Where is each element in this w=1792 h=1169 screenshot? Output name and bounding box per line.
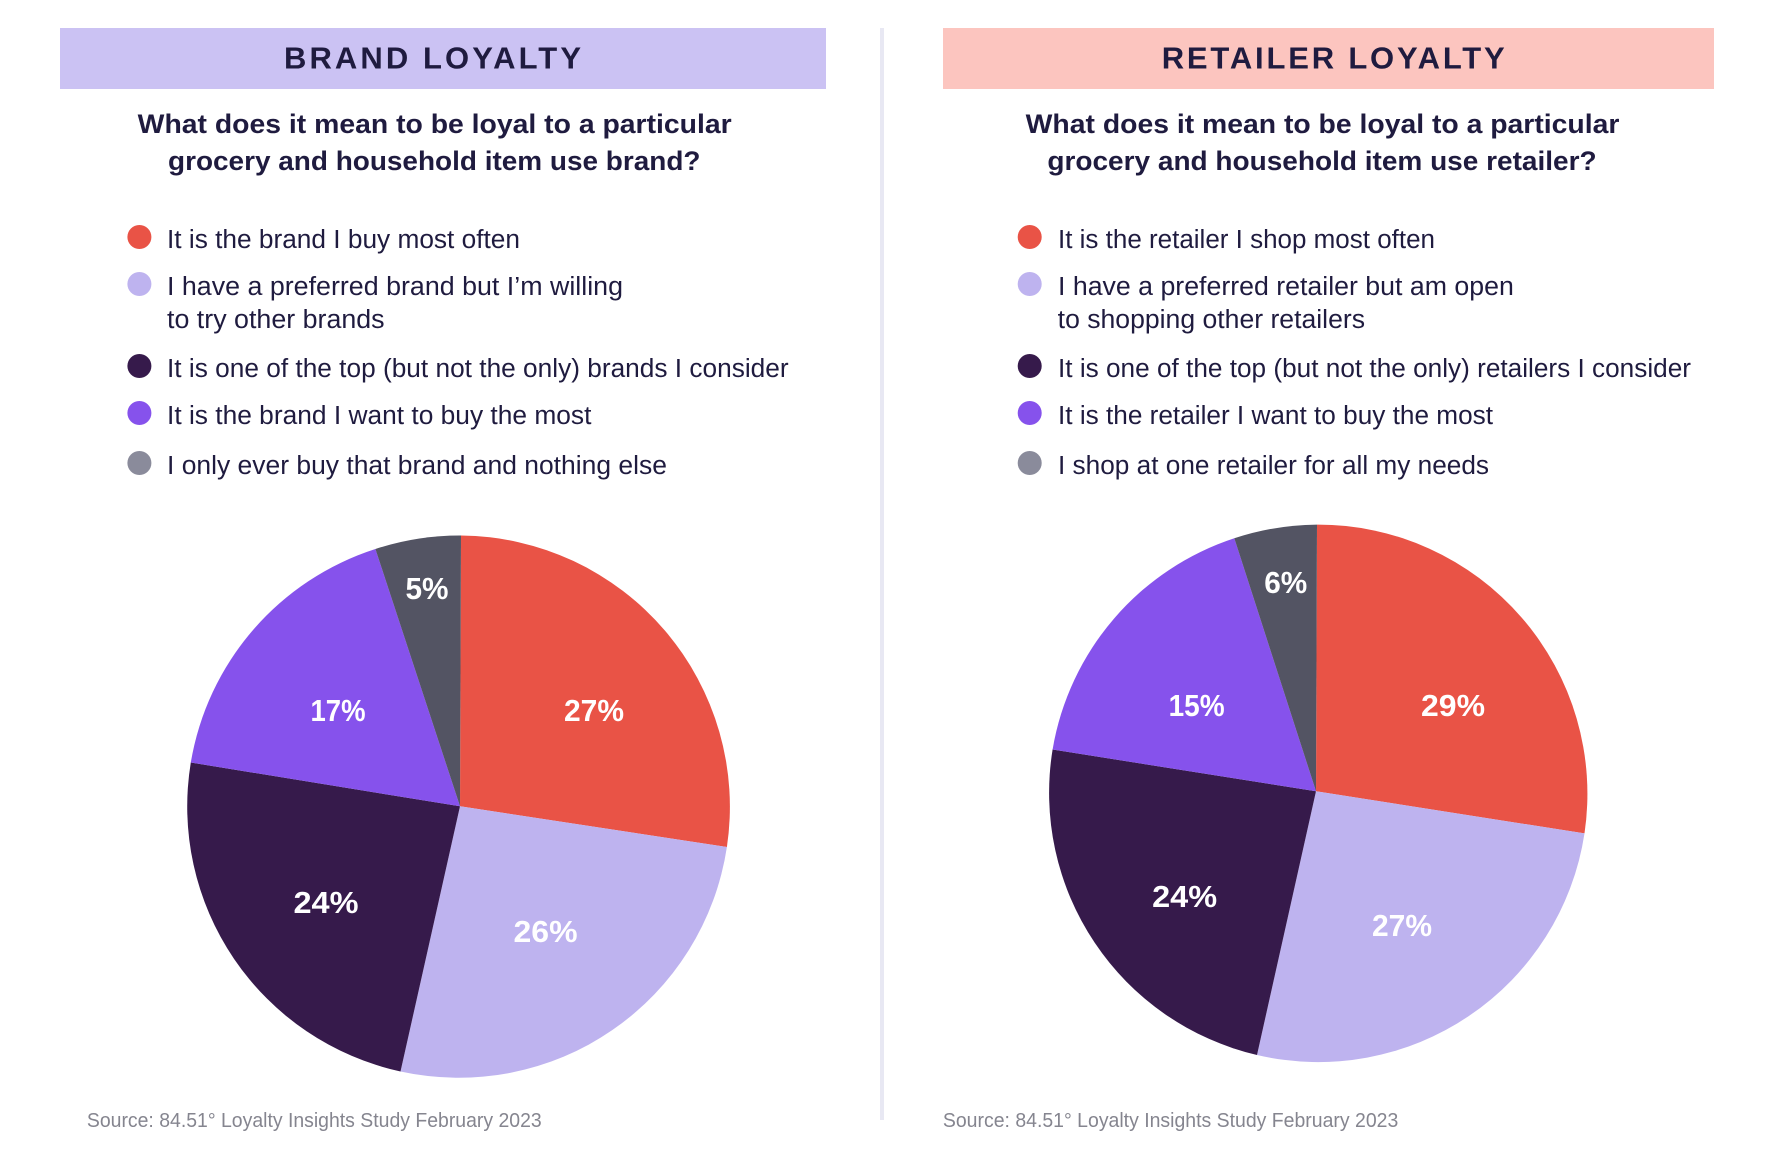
- pie chart: brand: 17%: [310, 693, 366, 728]
- pie chart: retailer: 15%: [1169, 688, 1225, 723]
- question: retailer: [1026, 109, 1620, 176]
- legend item: preferred brand: to try other brands: [167, 306, 385, 334]
- question: brand: What does it mean to be loyal to a particular: [138, 109, 732, 139]
- heading: retailer loyalty: RETAILER LOYALTY: [1162, 40, 1505, 76]
- legend item: want to buy: It is the retailer I want to buy the most: [1058, 402, 1493, 430]
- legend item: top brands: It is one of the top (but not the only) brands I consider: [167, 355, 789, 383]
- legend item: most often: It is the retailer I shop most often: [1058, 226, 1435, 254]
- legend item: preferred retailer: [1018, 272, 1514, 334]
- pie chart: brand: [187, 535, 730, 1078]
- source: brand: Source: 84.51° Loyalty Insights Study February 2023: [87, 1109, 542, 1132]
- question: retailer: What does it mean to be loyal to a particular: [1026, 109, 1620, 139]
- pie chart: brand: 27%: [564, 693, 624, 728]
- heading: brand loyalty: BRAND LOYALTY: [284, 40, 581, 76]
- legend item: preferred brand: [127, 272, 623, 334]
- pie chart: brand: 5%: [406, 571, 448, 606]
- legend: brand: [127, 225, 789, 480]
- pie chart: retailer: 24%: [1152, 879, 1217, 914]
- legend item: want to buy: It is the brand I want to buy the most: [167, 402, 591, 430]
- pie chart: retailer: 29%: [1421, 688, 1485, 723]
- pie chart: brand: 26%: [514, 914, 578, 949]
- legend item: preferred brand: I have a preferred brand but I’m willing: [167, 273, 623, 301]
- heading: brand loyalty: [60, 28, 826, 89]
- question: brand: grocery and household item use brand?: [168, 146, 700, 176]
- pie chart: retailer: 6%: [1264, 565, 1307, 600]
- pie chart: retailer: 27%: [1372, 908, 1432, 943]
- question: retailer: grocery and household item use retailer?: [1047, 146, 1597, 176]
- pie chart: retailer: [1049, 525, 1587, 1062]
- source: retailer: Source: 84.51° Loyalty Insights Study February 2023: [943, 1109, 1398, 1132]
- heading: retailer loyalty: [943, 28, 1714, 89]
- panel: brand loyalty: [60, 28, 826, 1132]
- legend: retailer: [1018, 225, 1692, 480]
- legend item: only brand: I only ever buy that brand and nothing else: [167, 452, 667, 480]
- pie chart: brand: 24%: [294, 885, 358, 920]
- legend item: most often: It is the brand I buy most often: [167, 226, 520, 254]
- legend item: preferred retailer: I have a preferred retailer but am open: [1058, 273, 1514, 301]
- question: brand: [138, 109, 732, 176]
- legend item: preferred retailer: to shopping other retailers: [1058, 306, 1365, 334]
- legend item: one retailer: I shop at one retailer for all my needs: [1058, 452, 1489, 480]
- panel: retailer loyalty: [943, 28, 1714, 1132]
- legend item: top retailers: It is one of the top (but not the only) retailers I consider: [1058, 355, 1692, 383]
